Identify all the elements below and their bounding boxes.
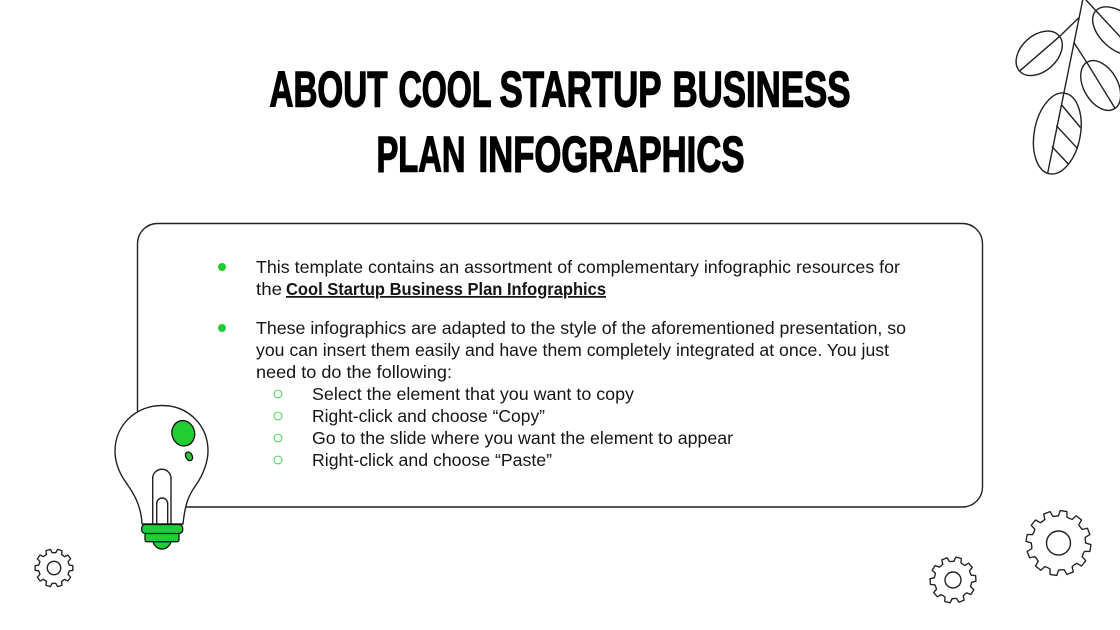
text block: second bullet [218, 318, 906, 382]
step 4: Right-click and choose “Paste” [312, 450, 552, 470]
text block: second bullet: you can insert them easily and have them completely integrated at once. You just [256, 340, 889, 360]
title: ABOUT [270, 61, 388, 117]
icon: leaf branch [1007, 0, 1120, 178]
bullet dot [218, 324, 226, 332]
text block: first bullet: Cool Startup Business Plan Infographics [286, 279, 606, 299]
icon: medium gear [928, 554, 978, 606]
step 3: Go to the slide where you want the element to appear [312, 428, 733, 448]
text block: first bullet: the [256, 279, 282, 299]
title: COOL [398, 61, 492, 117]
icon: light bulb [115, 406, 208, 549]
step 1: Select the element that you want to copy [312, 384, 634, 404]
title: BUSINESS [672, 61, 850, 117]
title: PLAN [376, 126, 466, 182]
panel: text card [138, 224, 982, 507]
text block: second bullet: need to do the following: [256, 362, 452, 382]
title [270, 61, 850, 182]
text block: sub-list steps [274, 384, 733, 470]
text block: first bullet: This template contains an assortment of complementary infographic resources for [256, 257, 900, 277]
text block: second bullet: These infographics are adapted to the style of the aforementioned presentation, so [256, 318, 906, 338]
title: INFOGRAPHICS [478, 126, 744, 182]
bullet dot [218, 263, 226, 271]
step 2: Right-click and choose “Copy” [312, 406, 545, 426]
title: STARTUP [500, 61, 662, 117]
text block: first bullet [218, 257, 900, 299]
icon: large gear [1021, 505, 1096, 581]
icon: small gear left [35, 548, 73, 588]
